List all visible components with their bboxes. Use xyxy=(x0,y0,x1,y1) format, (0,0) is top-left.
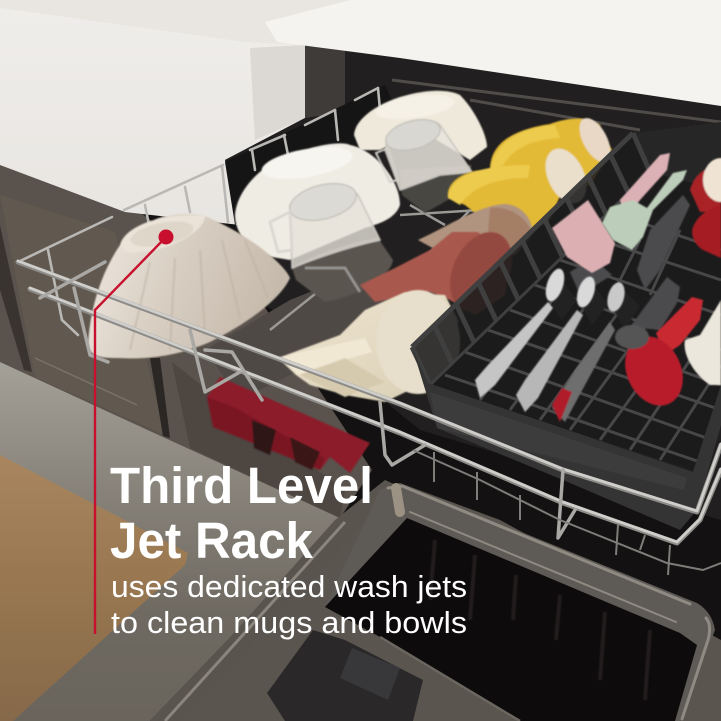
rack floor base behind dishes xyxy=(205,280,420,400)
white countertop xyxy=(265,0,721,106)
rack floor wires xyxy=(270,205,480,330)
pink spatula xyxy=(552,153,670,273)
sage spatula xyxy=(602,170,687,250)
yellow mugs xyxy=(448,113,617,235)
floor xyxy=(0,360,345,721)
third rack rear band and wires xyxy=(18,85,395,335)
basket side wall xyxy=(412,133,650,385)
subheading: to clean mugs and bowls xyxy=(111,605,467,640)
tub lower edge highlight xyxy=(380,637,520,721)
basket tray xyxy=(412,347,721,530)
basket grid xyxy=(445,212,721,462)
basket floor xyxy=(430,135,721,470)
white bowl, middle xyxy=(235,141,400,260)
red spoon xyxy=(614,297,703,415)
terracotta mug xyxy=(360,222,524,322)
black tub interior xyxy=(325,518,697,721)
red jet block xyxy=(207,377,370,473)
dark gray tines xyxy=(552,195,690,330)
tub reflections xyxy=(430,540,650,700)
front rack rails xyxy=(18,261,721,543)
lower rack wires xyxy=(413,450,721,575)
glass mug, back xyxy=(376,114,472,213)
interior gap panel xyxy=(305,44,345,118)
silver spoons xyxy=(475,266,628,422)
subheading xyxy=(111,569,467,640)
top light band xyxy=(0,0,721,60)
dark interior back wall xyxy=(225,42,721,520)
pink glass dish xyxy=(418,204,533,258)
rim corner highlights xyxy=(388,486,710,719)
dark cutlery basket xyxy=(412,122,721,530)
red lids xyxy=(690,158,721,258)
white bowl, back xyxy=(354,91,487,160)
basket upper back xyxy=(633,122,721,190)
door side strip xyxy=(155,480,398,721)
base cabinets xyxy=(0,160,372,518)
callout leader line and dot xyxy=(95,230,174,634)
cream utensil xyxy=(685,300,721,385)
door strip highlight xyxy=(165,522,345,721)
tub back wires xyxy=(392,80,721,130)
steel tub rim xyxy=(325,483,715,721)
heading: Jet Rack xyxy=(110,512,314,569)
heading xyxy=(110,457,373,569)
farmhouse sink xyxy=(0,8,305,225)
glass mug, front xyxy=(270,177,393,302)
dishwasher door xyxy=(150,480,721,721)
basket side lattice xyxy=(412,133,650,385)
detergent dispenser xyxy=(267,630,423,721)
ceramic bowl, callout target xyxy=(88,214,290,358)
woven rug xyxy=(0,455,188,721)
heading: Third Level xyxy=(110,457,373,514)
subheading: uses dedicated wash jets xyxy=(111,569,467,604)
cream mug xyxy=(278,290,460,402)
